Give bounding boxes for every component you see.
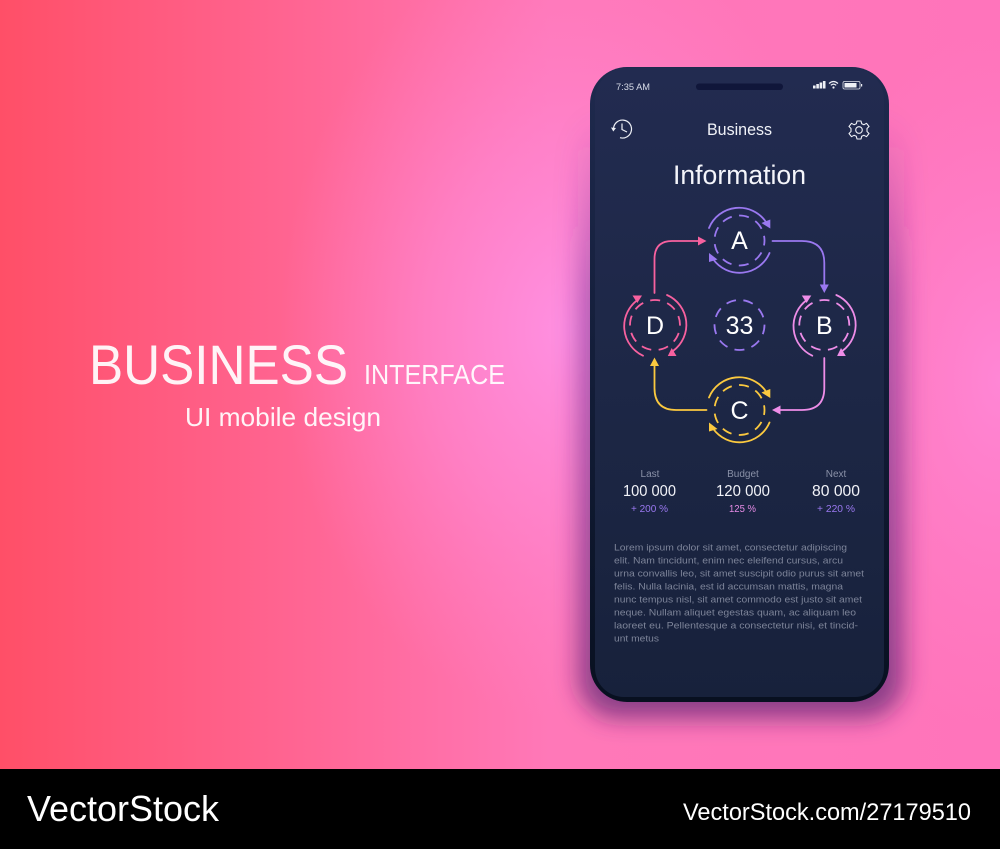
arrow: C to D [650, 358, 706, 410]
phone [590, 67, 889, 702]
tagline: UI mobile design [185, 402, 381, 432]
body paragraph: urna convallis leo, sit amet suscipit odio purus sit amet [614, 568, 864, 580]
node D: D [646, 312, 664, 340]
node A: A [731, 227, 748, 255]
arrow: A to B [772, 241, 829, 293]
center value 33: 33 [726, 312, 753, 340]
body paragraph: Lorem ipsum dolor sit amet, consectetur adipiscing [614, 542, 847, 554]
nav title: Business [707, 120, 772, 139]
node D [624, 295, 686, 356]
footer bar [0, 769, 1000, 849]
footer logo: VectorStock [27, 788, 220, 829]
body paragraph: nunc tempus nisl, sit amet commodo est justo sit amet [614, 594, 862, 606]
stat: budget: 125 % [729, 504, 756, 515]
body paragraph: elit. Nam tincidunt, enim nec eleifend cursus, arcu [614, 556, 843, 566]
body paragraph: unt metus [614, 634, 659, 644]
arrow: B to C [772, 358, 824, 414]
body paragraph: laoreet eu. Pellentesque a consectetur nisi, et tincid- [614, 620, 858, 632]
icon: settings gear [849, 121, 869, 139]
phone body [590, 67, 889, 702]
node C [709, 377, 770, 442]
arrow: D to A [654, 236, 706, 293]
cycle diagram [624, 208, 856, 442]
stat: budget [716, 469, 770, 515]
phone screen [595, 68, 884, 697]
footer url: VectorStock.com/27179510 [683, 799, 971, 826]
stat: last: Last [641, 469, 660, 480]
stat: last: 100 000 [623, 483, 676, 500]
headline block [89, 333, 505, 432]
screen heading: Information [673, 160, 806, 190]
stat: budget: 120 000 [716, 483, 770, 500]
subtitle: interface: INTERFACE [364, 359, 505, 390]
status icons [813, 81, 862, 89]
body paragraph: neque. Nullam aliquet egestas quam, ac aliquam leo [614, 608, 856, 618]
phone shadow [578, 110, 904, 718]
stat: next: + 220 % [817, 504, 855, 515]
stat: last: + 200 % [631, 504, 668, 515]
notch [696, 84, 783, 90]
icon: history [611, 120, 631, 138]
node B [793, 295, 856, 356]
stat: next: Next [826, 469, 847, 480]
body paragraph [614, 542, 864, 644]
node C: C [730, 397, 749, 425]
node B: B [816, 312, 833, 340]
body paragraph: felis. Nulla lacinia, est id accumsan mattis, magna [614, 582, 844, 592]
status bar time: 7:35 AM [616, 82, 650, 93]
stat: budget: Budget [727, 469, 759, 480]
stat: next [812, 469, 860, 515]
stat: next: 80 000 [812, 483, 860, 500]
node A [709, 208, 770, 273]
title: business: BUSINESS [89, 333, 348, 396]
center value 33 [714, 300, 764, 350]
stat: last [623, 469, 676, 515]
